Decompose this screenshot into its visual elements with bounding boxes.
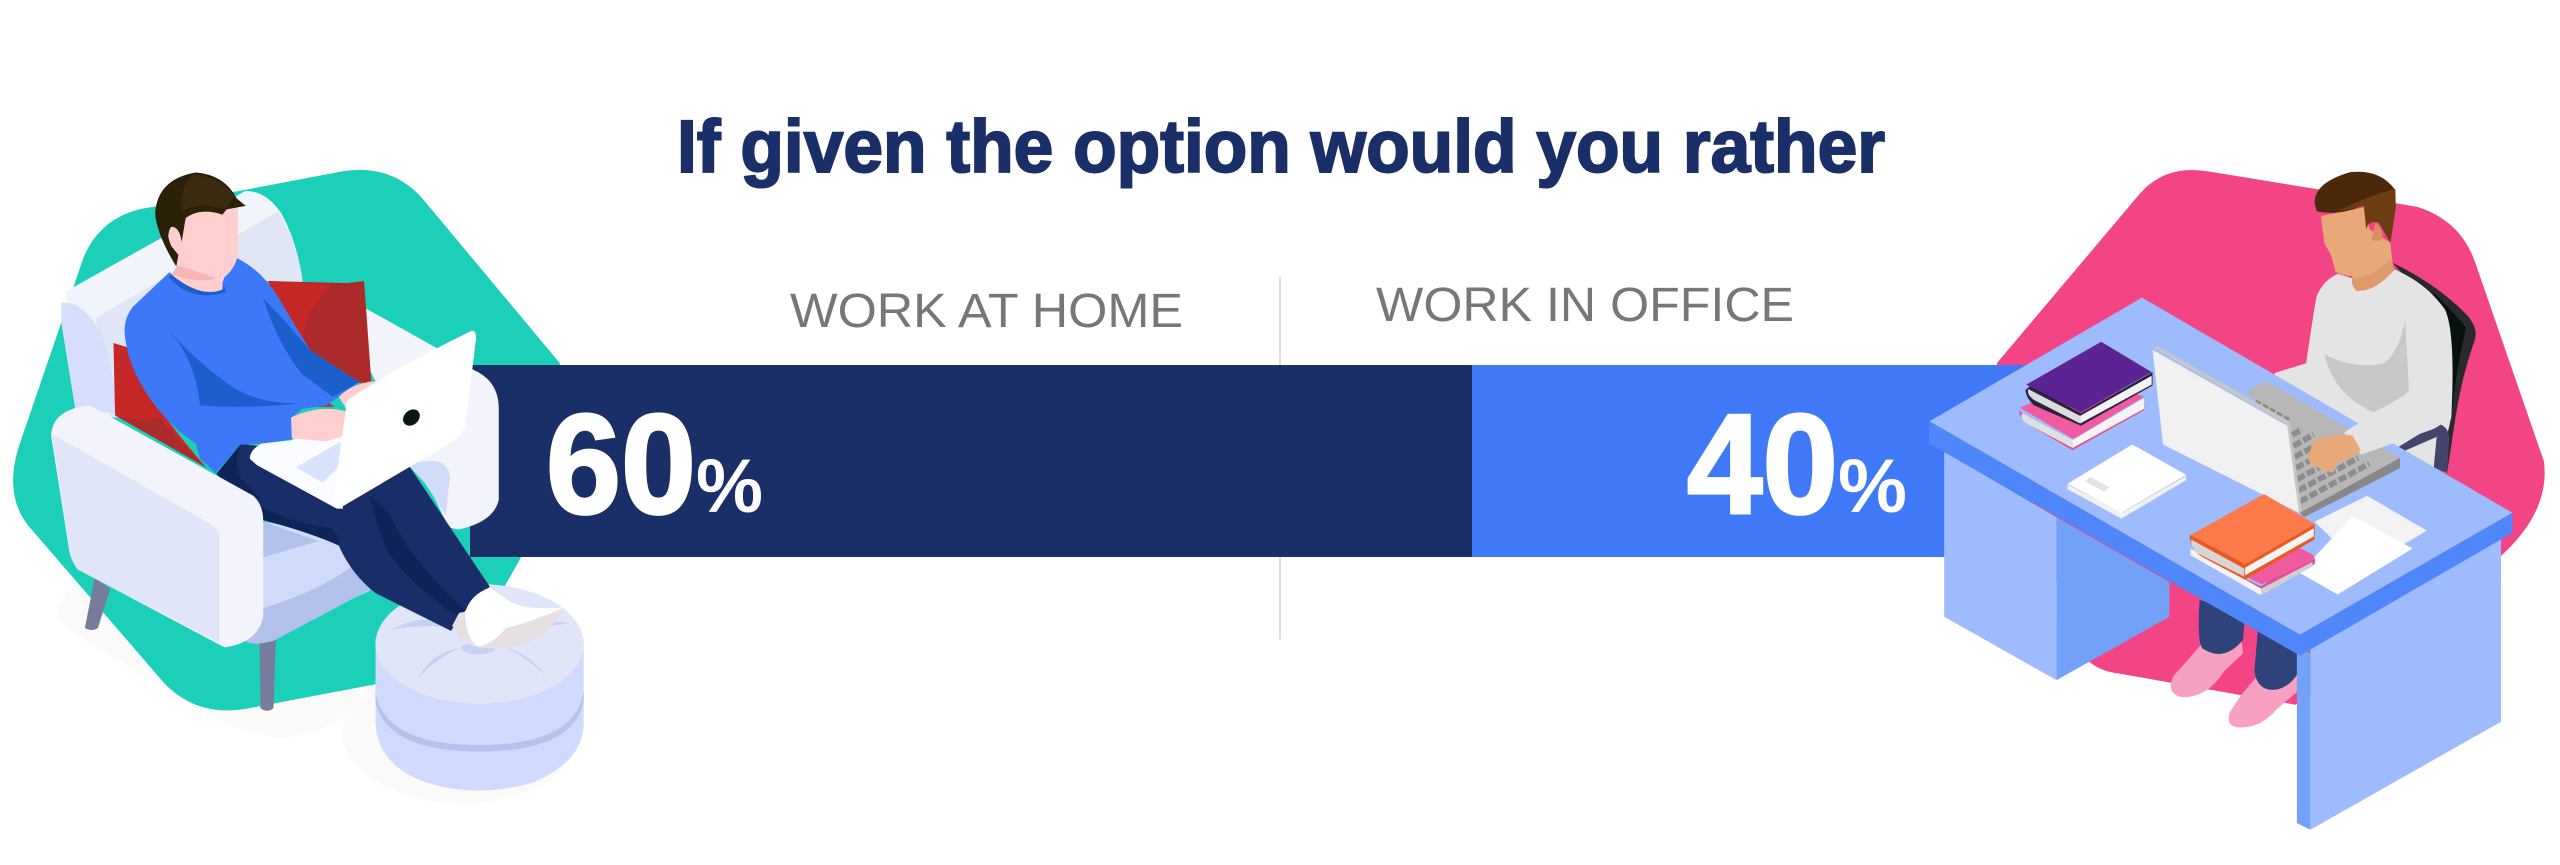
value: 40%: 40	[1687, 385, 1838, 544]
ottoman	[376, 584, 584, 791]
value: 60%: %	[696, 444, 763, 529]
teal blob background	[13, 170, 560, 710]
man torso and head	[2275, 172, 2453, 473]
man legs and slippers	[2171, 600, 2298, 728]
papers	[2300, 496, 2427, 594]
pink blob background	[1997, 170, 2545, 705]
value: 60%: 60	[546, 385, 696, 544]
bar: work at home 60%	[470, 365, 1472, 557]
man trousers	[216, 444, 490, 631]
chair inner seat side	[408, 461, 450, 515]
illustration: man on armchair with laptop	[51, 173, 584, 791]
man foot	[452, 588, 563, 648]
man head and hair	[155, 173, 246, 292]
bar chart	[470, 365, 2032, 557]
bar: work in office 40%	[1472, 365, 2032, 557]
chair seat	[245, 522, 371, 644]
illustration: man working at office desk	[1929, 172, 2512, 830]
office chair	[2323, 263, 2476, 473]
desk	[1929, 298, 2512, 830]
divider line	[1279, 277, 1281, 639]
value: 40%: %	[1838, 444, 1907, 529]
cushion: red right	[267, 281, 371, 407]
label: work at home: WORK AT HOME	[790, 285, 1183, 338]
orange and pink book stack	[2190, 494, 2315, 595]
chair right arm	[363, 307, 499, 529]
floor shadows	[57, 587, 580, 804]
title: If given the option would you rather	[677, 105, 1885, 188]
man arm and hand	[2307, 354, 2451, 473]
laptop with hands	[250, 331, 476, 509]
purple and pink book stack	[2019, 342, 2153, 450]
chair legs	[85, 578, 276, 711]
cushion: red left	[113, 343, 206, 467]
man torso and sweater	[124, 258, 359, 473]
laptop	[2153, 346, 2400, 517]
chair back	[61, 191, 303, 418]
white notebook	[2068, 444, 2186, 519]
front armrest	[51, 405, 263, 647]
label: work in office: WORK IN OFFICE	[1376, 279, 1794, 332]
